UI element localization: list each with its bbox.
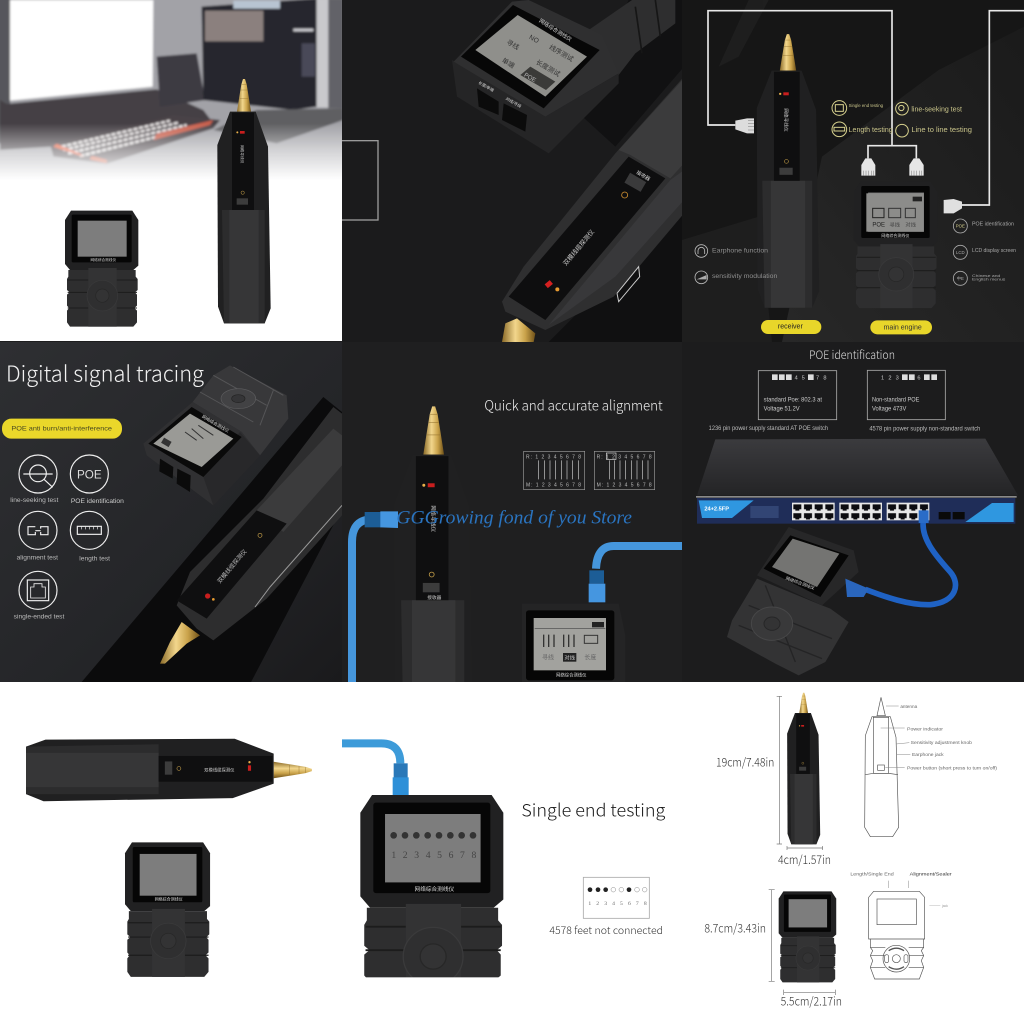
main unit with screen <box>522 604 625 684</box>
panel: POE identification <box>696 346 1017 676</box>
receiver pen <box>757 34 819 308</box>
unit height dimension <box>704 890 775 981</box>
badge: main engine: main engine <box>884 324 922 331</box>
background swaths <box>682 0 1024 342</box>
alignment box: fault: R: 1 2 3 4 5 6 7 8 <box>597 455 652 461</box>
receiver pen: 网络寻线仪 <box>429 505 437 533</box>
blue cable <box>865 510 956 605</box>
title: Digital signal tracing <box>6 356 204 388</box>
box: standard POE: 4 <box>795 375 798 381</box>
main unit, angled: 寻线 <box>505 37 521 52</box>
main unit with screen <box>342 795 684 1024</box>
pin result box <box>583 877 649 918</box>
main unit, angled: 长度测试 <box>534 57 562 79</box>
receiver pen: 接收器 <box>427 594 442 601</box>
box: standard POE <box>758 371 837 420</box>
panel: digital signal tracing <box>0 342 342 682</box>
receiver pen horizontal: 双模线缆探测仪 <box>204 766 235 773</box>
pin indicator dots <box>390 832 476 839</box>
box: non-standard POE: 1 <box>881 375 884 381</box>
network switch: 24+2.5FP <box>704 506 729 512</box>
feature icons and labels left: Earphone function <box>712 247 768 254</box>
caption: 4578 feet not connected <box>549 922 663 937</box>
panel: product photo on desk <box>0 0 342 327</box>
box: non-standard POE <box>867 370 945 420</box>
alignment box: normal: R: 1 2 3 4 5 6 7 8 <box>526 455 581 461</box>
box: non-standard POE: Voltage 473V <box>872 405 907 412</box>
main unit with screen: 网络综合测线仪 <box>556 671 587 678</box>
label: line-seeking test: line-seeking test <box>10 497 59 504</box>
main unit with screen: 网络综合测线仪 <box>415 885 454 893</box>
panel: receiver and main engine feature diagram <box>694 10 1024 342</box>
connector lines <box>708 11 1024 205</box>
main unit <box>65 211 138 327</box>
main unit, angled: 对线/寻线 <box>505 95 523 109</box>
pen part labels: antenna <box>900 704 918 709</box>
icon: alignment test <box>19 511 57 549</box>
unit line drawing <box>869 891 925 979</box>
main unit, angled: 长度/单端 <box>478 79 495 93</box>
blue cable to pen <box>352 511 398 682</box>
main unit, angled: NO <box>528 34 540 45</box>
receiver pen, angled <box>160 407 342 664</box>
box: non-standard POE: 2 <box>888 375 891 381</box>
network switch <box>696 439 1018 524</box>
feature icons and labels right: POE identification <box>972 222 1014 228</box>
caption: standard: 1236 pin power supply standard AT POE switch <box>709 425 828 432</box>
blue cable and plug <box>342 743 409 795</box>
pen width dimension: 4cm/1.57in <box>778 851 831 868</box>
main unit, angled <box>143 365 288 505</box>
yellow badge: POE anti burn/anti-interference <box>11 425 112 432</box>
box: non-standard POE: 3 <box>896 375 899 381</box>
feature icons and labels right: Chinese and <box>972 273 1000 278</box>
receiver pen <box>217 79 271 323</box>
main unit with menu screen: POE <box>872 223 885 229</box>
alignment box: fault: M: 1 2 3 4 5 6 7 8 <box>597 483 652 489</box>
main unit, angled: POE <box>523 73 537 84</box>
unit port labels: jack <box>941 904 948 908</box>
pen height dimension: 19cm/7.48in <box>716 754 774 771</box>
icon: line-seeking test <box>19 455 57 493</box>
box: non-standard POE: Non-standard POE <box>872 396 919 403</box>
desk photo background <box>0 0 345 199</box>
feature icons and labels top: Length testing <box>849 127 893 134</box>
box: standard POE: Voltage 51.2V <box>764 405 800 412</box>
unit port labels: Length/Single End <box>850 871 894 876</box>
caption: non-standard: 4578 pin power supply non-standard switch <box>869 426 981 433</box>
box: standard POE: 5 <box>802 375 805 381</box>
pin numbers: 1 2 3 4 5 6 7 8 <box>391 850 477 861</box>
main unit with menu screen <box>854 182 937 308</box>
unit height dimension: 8.7cm/3.43in <box>704 920 766 937</box>
feature icons and labels left <box>695 245 778 284</box>
main unit: 网络综合测线仪 <box>91 257 116 262</box>
main unit: 网络综合测线仪 <box>155 896 183 902</box>
feature icons and labels right: English menus <box>972 277 1005 282</box>
alignment box: normal <box>524 451 585 490</box>
receiver pen <box>394 406 473 768</box>
receiver pen: 网络寻线仪 <box>783 108 790 132</box>
main unit <box>125 842 210 977</box>
feature icons and labels top: Line to line testing <box>911 127 972 134</box>
panel: side view of both devices <box>26 738 312 977</box>
badge: receiver: receiver <box>778 323 803 330</box>
receiver pen, angled <box>502 77 684 342</box>
panel: angled close-up of both devices <box>342 0 682 342</box>
panel: dimensions and parts <box>704 692 997 1010</box>
label: single-ended test: single-ended test <box>14 614 64 621</box>
main unit with menu screen: 网络综合测线仪 <box>881 232 909 238</box>
plugs top <box>861 158 924 176</box>
pen part labels: Power button (short press to turn on/off) <box>907 766 997 771</box>
heading: POE identification <box>809 346 895 363</box>
pen part labels: Sensitivity adjustment knob <box>911 740 972 745</box>
pen width dimension <box>778 846 831 868</box>
feature icons and labels right: LCD <box>956 250 965 255</box>
receiver pen horizontal <box>26 739 312 801</box>
feature icons and labels top: Single end testing <box>849 103 884 108</box>
main unit, angled: 网络综合测线仪 <box>538 17 574 43</box>
pin result box: 1 2 3 4 5 6 7 8 <box>588 901 647 907</box>
badge: main engine <box>870 320 932 334</box>
main unit with screen: 长度 <box>584 653 596 661</box>
label: POE identification: POE identification <box>71 498 124 505</box>
heading: Single end testing <box>521 797 666 822</box>
watermark: GGGrowing fond of you Store <box>396 508 632 529</box>
receiver pen: 网络寻线仪 <box>240 145 245 164</box>
unit port labels <box>850 871 952 908</box>
main unit with screen: 寻线 <box>542 653 554 661</box>
box: standard POE: 8 <box>823 375 826 381</box>
blue cable to main unit <box>589 546 685 602</box>
feature icons and labels left: sensitivity modulation <box>712 273 778 280</box>
pen photo <box>787 693 820 844</box>
panel: single end testing <box>342 739 666 978</box>
main unit photo <box>779 891 836 982</box>
plug right <box>944 199 962 213</box>
main unit, angled <box>452 0 675 153</box>
pen height dimension <box>716 696 782 844</box>
label: alignment test: alignment test <box>17 554 58 561</box>
icon: POE identification <box>70 455 108 493</box>
box: standard POE: 7 <box>816 375 819 381</box>
icon: single-ended test <box>19 571 57 609</box>
unit port labels: Alignment/Sealer <box>910 871 952 876</box>
heading: Quick and accurate alignment <box>484 395 663 415</box>
main unit, angled: 网络综合测线仪 <box>785 575 816 592</box>
main unit, angled: 线序测试 <box>548 42 576 64</box>
label: length test: length test <box>79 555 110 562</box>
feature icons and labels top: line-seeking test <box>911 106 962 113</box>
receiver pen, angled: 双模线缆探测仪 <box>561 227 596 267</box>
yellow badge <box>2 419 122 439</box>
pen part labels: Earphone jack <box>912 752 944 757</box>
box: non-standard POE: 6 <box>917 375 920 381</box>
receiver pen, angled: 接收器 <box>635 169 652 183</box>
icon: POE identification: POE <box>77 468 102 481</box>
feature icons and labels right: POE <box>956 224 965 229</box>
main unit, angled <box>727 527 869 675</box>
receiver pen, angled: 双模线缆探测仪 <box>215 548 249 585</box>
main unit, angled: 网络综合测线仪 <box>201 413 231 435</box>
outline box <box>341 141 378 220</box>
alignment box: normal: M: 1 2 3 4 5 6 7 8 <box>526 483 581 489</box>
icon: length test <box>70 511 108 549</box>
panel: quick and accurate alignment <box>348 395 682 682</box>
main unit with screen: 对线 <box>564 653 576 661</box>
pen line drawing <box>865 697 899 837</box>
box: standard POE: standard Poe: 802.3 at <box>764 396 822 403</box>
feature icons and labels right: LCD display screen <box>972 248 1016 254</box>
feature icons and labels right: 中E <box>957 275 964 282</box>
unit width dimension: 5.5cm/2.17in <box>781 993 842 1010</box>
feature icons and labels top <box>832 101 972 137</box>
pen part labels <box>881 704 997 771</box>
feature icons and labels right <box>953 219 1016 285</box>
alignment box: fault <box>594 451 655 490</box>
main unit with menu screen: 寻线 <box>889 221 901 229</box>
main unit, angled: 单端 <box>500 56 517 70</box>
badge: receiver <box>761 320 821 334</box>
pen part labels: Power indicator <box>907 727 944 732</box>
main unit with menu screen: 对线 <box>905 221 917 229</box>
plug left <box>735 118 754 133</box>
